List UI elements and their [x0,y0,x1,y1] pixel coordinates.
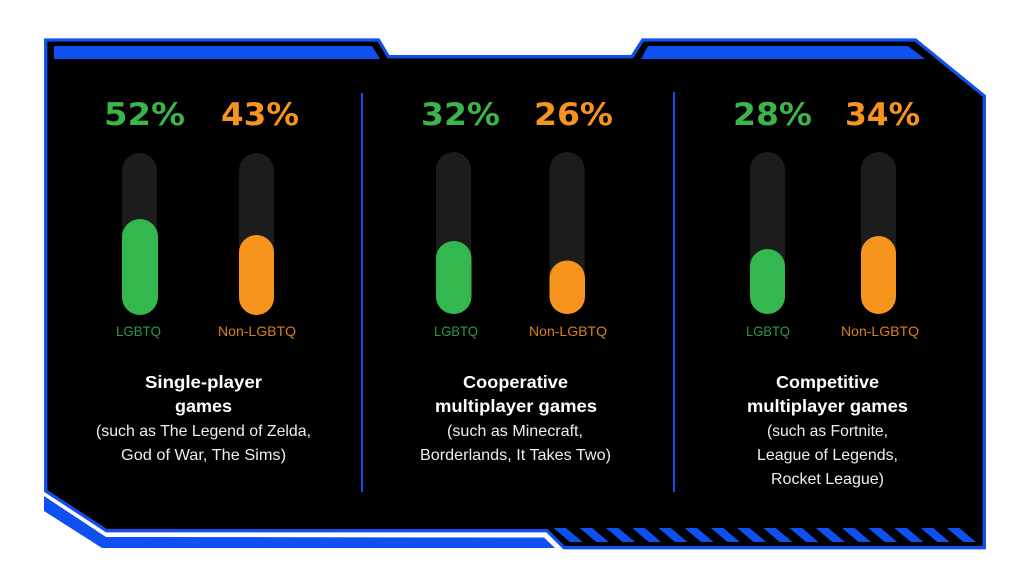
caption: competitive: multiplayer games [747,396,908,416]
bar fill: Non-LGBTQ [861,236,896,314]
caption: single-player: games [175,396,232,416]
divider left [361,93,363,492]
caption: single-player [96,372,311,464]
label: LGBTQ: LGBTQ [434,323,478,339]
bar track: LGBTQ [436,152,471,314]
bar track: LGBTQ [122,153,157,315]
panel: black frame with blue border [46,40,984,548]
label: Non-LGBTQ: Non-LGBTQ [218,323,296,339]
stat: LGBTQ 28%: 28% [733,97,812,133]
top right accent bar [641,46,925,59]
bar track: Non-LGBTQ [239,153,274,315]
caption: cooperative: (such as Minecraft, [447,423,583,440]
stat: Non-LGBTQ 43%: 43% [221,97,299,133]
stat: Non-LGBTQ 34%: 34% [845,97,920,133]
stat: LGBTQ 52%: 52% [104,97,185,133]
caption: cooperative: multiplayer games [435,396,597,416]
caption: competitive: Competitive [776,372,879,392]
panel: competitive multiplayer games [733,97,920,488]
bar track: Non-LGBTQ [550,152,584,314]
bar fill: LGBTQ [750,249,785,314]
label: LGBTQ: LGBTQ [116,323,161,339]
caption: competitive: League of Legends, [757,447,898,464]
bar fill: LGBTQ [122,219,158,315]
stat: Non-LGBTQ 26%: 26% [534,97,613,133]
panel: cooperative multiplayer games [420,97,613,464]
bar track: Non-LGBTQ [861,152,896,314]
caption: competitive: Rocket League) [771,471,884,488]
bar fill: LGBTQ [436,241,472,314]
label: LGBTQ: LGBTQ [746,323,790,339]
caption: competitive [747,372,908,488]
bar fill: Non-LGBTQ [550,260,585,314]
caption: competitive: (such as Fortnite, [767,423,888,440]
caption: single-player: God of War, The Sims) [121,447,286,464]
bar track: LGBTQ [750,152,785,314]
stat: LGBTQ 32%: 32% [421,97,500,133]
caption: cooperative [420,372,611,464]
caption: single-player: Single-player [145,372,262,392]
caption: cooperative: Borderlands, It Takes Two) [420,447,611,464]
caption: single-player: (such as The Legend of Zelda, [96,423,311,440]
caption: cooperative: Cooperative [463,372,568,392]
label: Non-LGBTQ: Non-LGBTQ [841,323,919,339]
bottom left accent strip [44,496,555,548]
top left accent bar [54,46,380,59]
label: Non-LGBTQ: Non-LGBTQ [529,323,607,339]
panel: single-player games [96,97,311,464]
bar fill: Non-LGBTQ [239,235,274,315]
divider right [673,92,675,492]
bottom right hazard stripes [554,528,976,542]
